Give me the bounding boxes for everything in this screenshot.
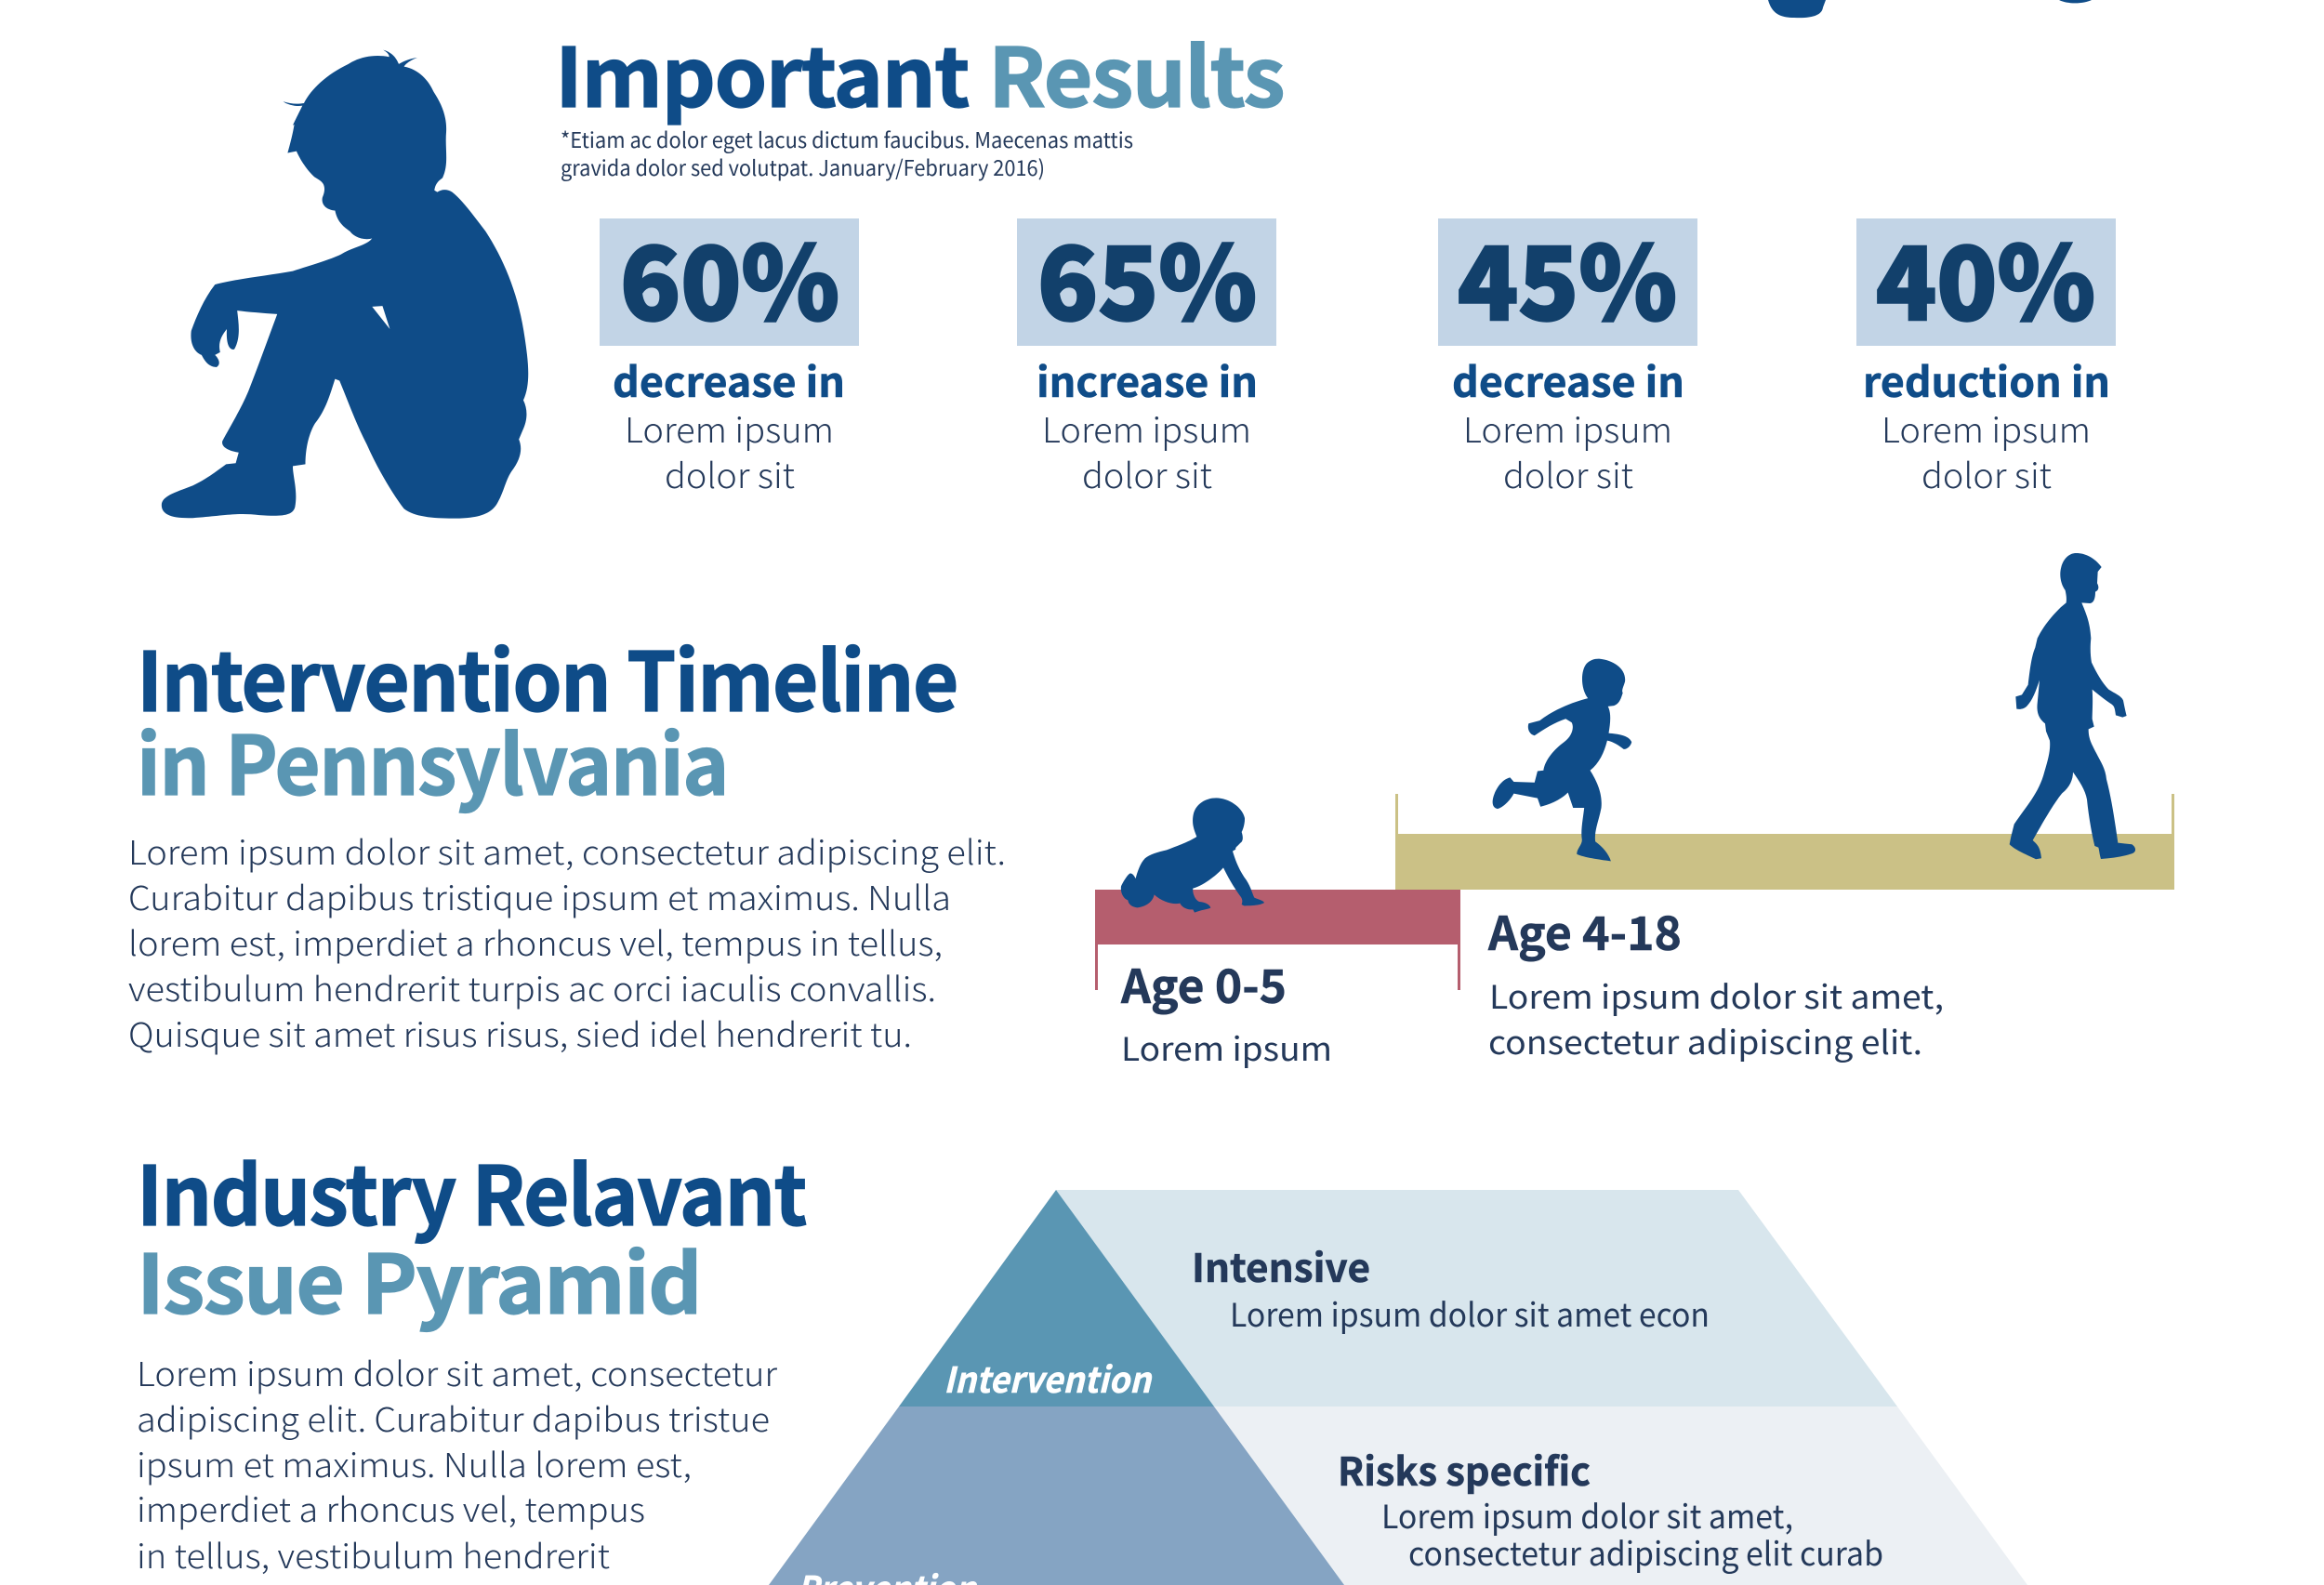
label: Age 4-18: Lorem ipsum dolor sit amet, [1489, 971, 1944, 1019]
pyramid paragraph: ipsum et maximus. Nulla lorem est, [137, 1439, 692, 1487]
pyramid tier: prevention [769, 1407, 1344, 1585]
pyramid diagram [769, 1190, 2027, 1585]
stat: 40% reduction: 40% [1876, 204, 2095, 350]
stat: 60% decrease: Lorem ipsum [625, 403, 834, 453]
stat: 60% decrease: 60% [620, 204, 839, 350]
stat: 65% increase: dolor sit [1082, 448, 1212, 498]
stat: 60% decrease: decrease in [613, 350, 845, 409]
footnote text [561, 123, 1133, 182]
icon: running child [1493, 659, 1631, 861]
text: intensive description: Lorem ipsum dolor sit amet econ [1230, 1289, 1710, 1337]
cut-off silhouettes at top edge [1768, 0, 2092, 18]
stat: 40% reduction: reduction in [1863, 350, 2110, 409]
timeline paragraph: Lorem ipsum dolor sit amet, consectetur adipiscing elit. [128, 826, 1006, 875]
stat: 45% decrease: Lorem ipsum [1463, 403, 1672, 453]
label: Intervention: Intervention [944, 1352, 1153, 1403]
timeline bar: age 4-18 [1395, 794, 2174, 890]
label: Age 4-18: Age 4-18 [1487, 897, 1682, 964]
text: risks description: consectetur adipiscing elit curab [1408, 1528, 1883, 1576]
title: Important Results: Results [988, 13, 1284, 131]
label: Risks specific: Risks specific [1338, 1441, 1591, 1498]
icon: crawling baby [1121, 798, 1264, 913]
title: Important Results: Important [555, 13, 969, 131]
heading: Intervention Timeline: in Pennsylvania [137, 701, 728, 819]
timeline paragraph: vestibulum hendrerit turpis ac orci iaculis convallis. [128, 963, 936, 1011]
stat: 45% decrease: decrease in [1452, 350, 1684, 409]
pyramid tier: intervention triangle [899, 1190, 1214, 1407]
stat: 40% reduction: dolor sit [1921, 448, 2052, 498]
stat: 65% increase [1017, 204, 1276, 498]
text: risks description [1381, 1491, 1883, 1576]
pyramid paragraph [137, 1348, 778, 1578]
timeline paragraph: Quisque sit amet risus risus, sied idel hendrerit tu. [128, 1009, 912, 1057]
label: Age 4-18: consectetur adipiscing elit. [1488, 1017, 1922, 1064]
stat: 60% decrease: dolor sit [665, 448, 795, 498]
footnote text: *Etiam ac dolor eget lacus dictum faucibus. Maecenas mattis [561, 123, 1133, 154]
timeline bar: age 0-5 [1095, 890, 1460, 990]
stat: 40% reduction [1856, 204, 2116, 498]
stat: 45% decrease: 45% [1458, 204, 1677, 350]
timeline paragraph: Curabitur dapibus tristique ipsum et maximus. Nulla [128, 872, 951, 920]
heading: Industry Relavant Issue Pyramid [137, 1131, 806, 1338]
stat: 65% increase: 65% [1037, 204, 1257, 350]
label: Age 4-18 [1487, 897, 1944, 1064]
timeline paragraph [128, 826, 1006, 1057]
pyramid tier: intensive panel [1056, 1190, 1897, 1407]
stat: 45% decrease [1438, 204, 1697, 498]
pyramid paragraph: Lorem ipsum dolor sit amet, consectetur [137, 1348, 778, 1396]
heading: Industry Relavant Issue Pyramid: Issue Pyramid [137, 1220, 701, 1338]
footnote text: gravida dolor sed volutpat. January/February 2016) [561, 151, 1045, 182]
heading: Industry Relavant Issue Pyramid: Industry Relavant [137, 1131, 806, 1249]
label: Age 0-5: Age 0-5 [1120, 950, 1287, 1017]
timeline paragraph: lorem est, imperdiet a rhoncus vel, tempus in tellus, [128, 918, 943, 966]
label: Intensive: Intensive [1192, 1237, 1370, 1294]
stat: 65% increase: Lorem ipsum [1042, 403, 1251, 453]
icon: walking adult [2010, 553, 2135, 859]
label: Age 0-5 [1120, 950, 1332, 1071]
pyramid paragraph: adipiscing elit. Curabitur dapibus tristue [137, 1393, 770, 1442]
heading: Intervention Timeline [137, 617, 957, 819]
stat: 45% decrease: dolor sit [1503, 448, 1633, 498]
pyramid paragraph: in tellus, vestibulum hendrerit [137, 1530, 610, 1578]
text: risks description: Lorem ipsum dolor sit amet, [1381, 1491, 1793, 1539]
stat: 40% reduction: Lorem ipsum [1882, 403, 2091, 453]
pyramid paragraph: imperdiet a rhoncus vel, tempus [137, 1484, 645, 1532]
icon: sitting boy silhouette [162, 50, 528, 519]
label: Age 0-5: Lorem ipsum [1121, 1024, 1332, 1071]
title: Important Results [555, 13, 1284, 131]
heading: Intervention Timeline: Intervention Timeline [137, 617, 957, 735]
stat: 60% decrease [600, 204, 859, 498]
pyramid tier: risks specific panel [1214, 1407, 2027, 1585]
stat: 65% increase: increase in [1037, 350, 1258, 409]
